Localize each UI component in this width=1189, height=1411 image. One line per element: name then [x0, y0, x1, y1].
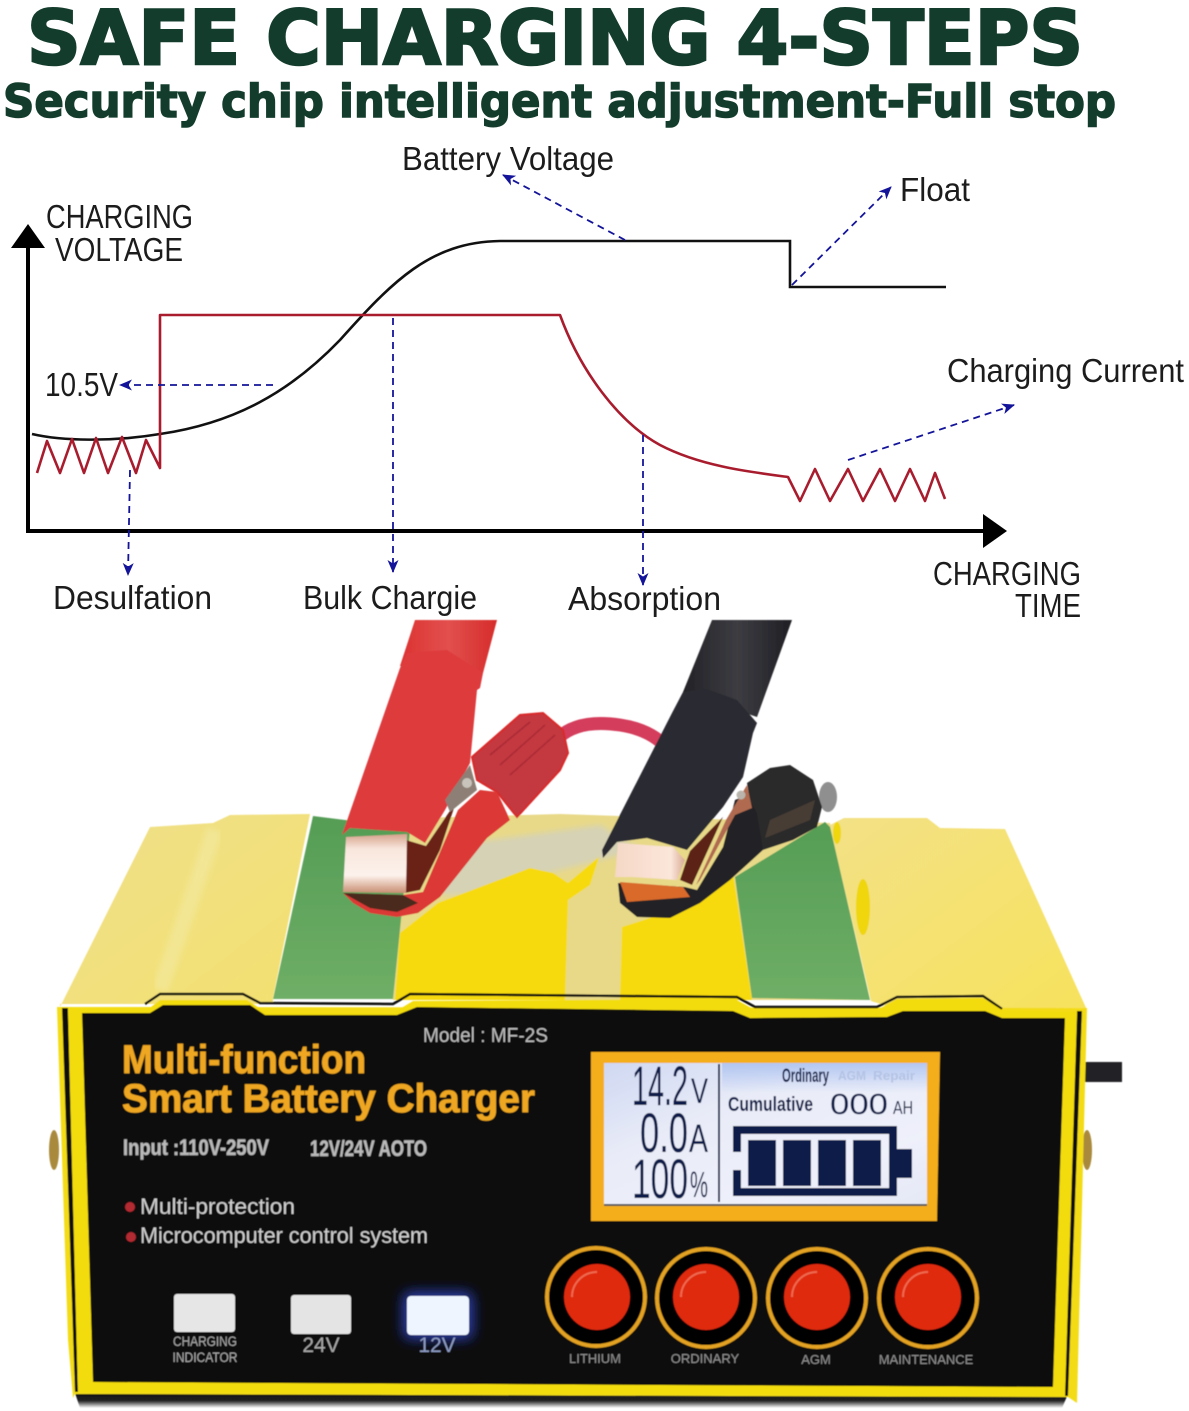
shell black edge stripes	[62, 1008, 1082, 1396]
red jaw dark lip	[343, 893, 418, 912]
roof green stripe left	[273, 816, 410, 999]
product heading: Smart Battery Charger	[122, 1077, 535, 1121]
LCD readings: Ordinary	[782, 1066, 829, 1087]
red jaw handle	[472, 713, 568, 817]
product heading: Multi-function	[122, 1038, 366, 1082]
battery voltage curve	[32, 241, 946, 440]
LCD readings: 14.2	[632, 1054, 688, 1117]
input specs	[123, 1135, 427, 1161]
front yellow frame	[68, 998, 1077, 1396]
LCD readings: AH	[893, 1098, 913, 1118]
pink jumper wire	[558, 723, 666, 747]
black sleeve	[602, 689, 757, 858]
chart labels: CHARGING	[933, 555, 1081, 592]
product heading	[122, 1038, 535, 1121]
dashed callout arrows	[120, 175, 1014, 585]
LCD blue top tint	[722, 1063, 927, 1093]
maintenance button	[879, 1249, 977, 1367]
red copper tip	[343, 834, 407, 893]
roof yellow reflection left	[395, 857, 599, 1000]
LCD ghost labels: AGM	[838, 1068, 866, 1083]
chart labels: Battery Voltage	[402, 140, 614, 177]
clamp pivot	[445, 765, 477, 812]
roof left highlight	[160, 830, 215, 990]
red cable	[400, 620, 497, 673]
roof middle cream	[345, 814, 870, 1000]
clamp interior	[680, 817, 723, 885]
black lower jaw	[618, 795, 763, 918]
lithium button: LITHIUM	[569, 1351, 621, 1366]
LCD readings: 0.0	[640, 1101, 688, 1164]
chart labels: TIME	[1015, 587, 1081, 624]
AGM button: AGM	[801, 1352, 831, 1367]
chart: charging curve	[11, 140, 1184, 624]
charging indicator	[172, 1294, 238, 1365]
roof green stripe right	[735, 822, 870, 1000]
lithium button	[547, 1248, 645, 1366]
rear power cable	[1085, 1062, 1122, 1082]
charger photo	[49, 620, 1122, 1408]
LCD divider	[718, 1064, 720, 1202]
LCD readings: Cumulative	[728, 1094, 813, 1116]
roof left panel	[60, 814, 310, 1007]
black clamp	[602, 620, 837, 918]
LCD readings: 100	[632, 1147, 688, 1210]
chart labels	[45, 140, 1184, 624]
front top black edge	[145, 994, 1002, 1009]
LCD readings: %	[690, 1164, 708, 1205]
charging indicator: INDICATOR	[172, 1350, 238, 1365]
charger outer shell	[57, 1007, 1087, 1403]
24V indicator: 24V	[302, 1334, 340, 1357]
LCD readings: 000	[830, 1089, 888, 1121]
chart labels: Float	[900, 171, 970, 208]
12V indicator lit	[403, 1292, 473, 1357]
red sleeve	[342, 650, 483, 843]
handle brown sheen	[765, 800, 815, 838]
black cable	[683, 620, 792, 717]
feature list: Microcomputer control system	[140, 1223, 428, 1248]
grey cable stub	[819, 782, 837, 812]
side screw left	[49, 1130, 59, 1170]
black lower orange lip	[620, 882, 690, 902]
charging current curve	[37, 315, 945, 501]
LCD readings	[632, 1054, 913, 1210]
red clamp	[342, 620, 568, 917]
handle ribs	[490, 722, 555, 775]
clamp pivot	[736, 790, 746, 800]
LCD lower edge	[604, 1204, 927, 1206]
feature list: Multi-protection	[140, 1194, 295, 1219]
roof right panel	[830, 818, 1087, 1010]
pivot bolt	[462, 778, 472, 788]
LCD readings: V	[691, 1072, 708, 1111]
maintenance button: MAINTENANCE	[879, 1352, 974, 1367]
battery level icon	[733, 1126, 912, 1196]
12V indicator lit: 12V	[418, 1334, 456, 1357]
black front panel	[82, 1005, 1065, 1387]
model label: Model : MF-2S	[423, 1025, 548, 1047]
side screw right	[1082, 1130, 1092, 1170]
LCD readings: A	[689, 1117, 708, 1161]
chart labels: VOLTAGE	[55, 231, 183, 268]
ordinary button	[657, 1249, 755, 1366]
LCD ghost labels: Repair	[873, 1068, 915, 1083]
chart labels: Absorption	[568, 580, 721, 617]
LCD orange bezel	[591, 1052, 940, 1221]
ordinary button: ORDINARY	[671, 1351, 740, 1366]
feature list	[125, 1194, 428, 1248]
charger roof	[60, 814, 1087, 1010]
chart labels: 10.5V	[45, 366, 118, 403]
LCD screen	[604, 1063, 927, 1205]
24V indicator	[291, 1295, 351, 1357]
right panel yellow spots	[833, 822, 870, 935]
indicator lights	[172, 1292, 473, 1365]
mode buttons	[547, 1248, 977, 1367]
black copper tip	[615, 843, 685, 880]
chart labels: CHARGING	[46, 198, 193, 235]
red lower jaw	[343, 790, 510, 917]
roof yellow reflection right	[620, 873, 752, 1000]
LCD display	[591, 1052, 940, 1221]
charging indicator: CHARGING	[173, 1334, 237, 1349]
LCD ghost labels	[838, 1068, 915, 1083]
clamp interior	[405, 802, 456, 893]
roof shadow under red clip	[440, 825, 640, 895]
black jaw handle	[747, 765, 822, 850]
chart axes	[11, 224, 1007, 548]
input specs: 12V/24V AOTO	[310, 1136, 427, 1161]
subtitle: Security chip intelligent adjustment-Full stop	[3, 75, 1116, 128]
AGM button	[768, 1249, 866, 1367]
copper jaw strip	[696, 785, 752, 885]
chart labels: Desulfation	[53, 579, 212, 616]
input specs: Input :110V-250V	[123, 1135, 269, 1160]
underside shadow	[74, 1390, 1068, 1408]
chart labels: Bulk Chargie	[303, 579, 477, 616]
